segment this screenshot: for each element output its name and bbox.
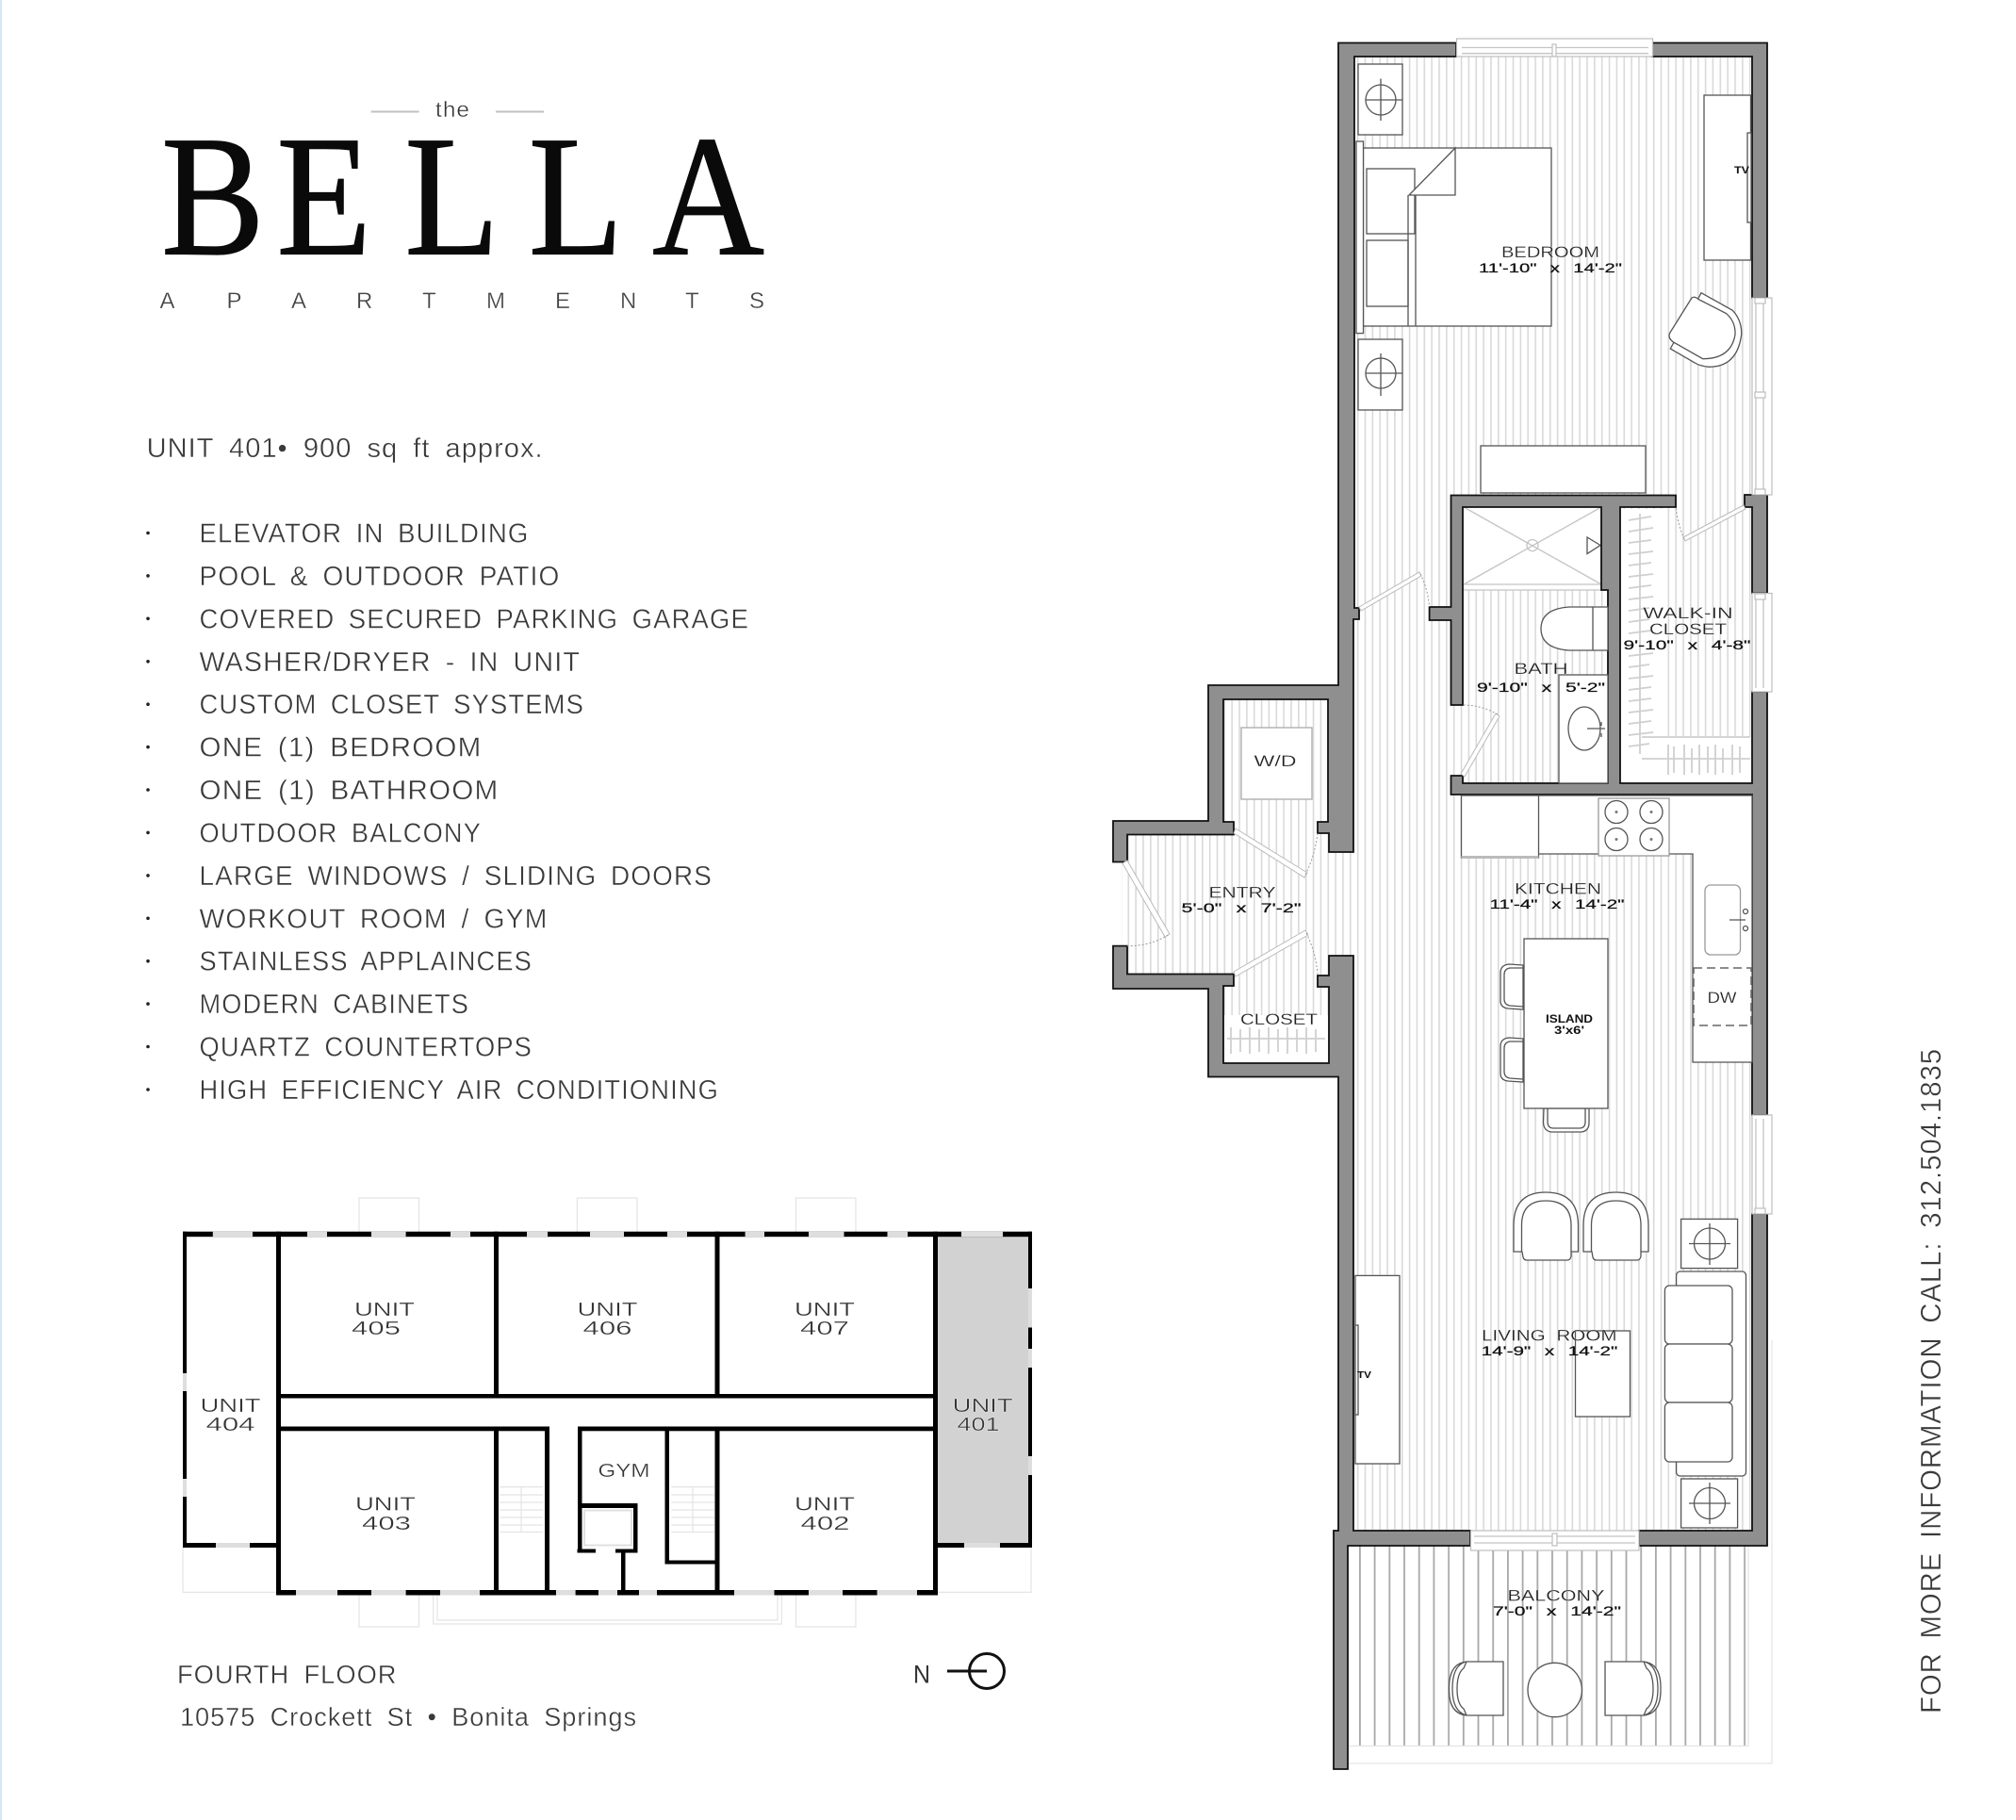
unit labels: 404: [205, 1415, 254, 1435]
unit labels: UNIT: [795, 1495, 855, 1516]
unit labels: 406: [582, 1319, 631, 1339]
logo subtitle: APARTMENTS: APARTMENTS: [160, 288, 764, 314]
wall: lower-left and balcony: [1113, 946, 1470, 1769]
fourth floor key plan: [183, 1198, 1032, 1627]
amenities list: ELEVATOR IN BUILDING: [200, 518, 530, 549]
kitchen sink: [1705, 885, 1747, 955]
TV console: [1355, 1275, 1400, 1464]
amenities list: QUARTZ COUNTERTOPS: [200, 1033, 533, 1063]
floor caption: FOURTH FLOOR: [177, 1660, 398, 1689]
dishwasher: DW: [1708, 989, 1736, 1007]
wall: bottom-right: [1639, 1214, 1767, 1546]
balconies outline: [183, 1198, 1031, 1627]
balcony chair right: [1605, 1662, 1661, 1715]
wall: top-left and laundry: [1113, 43, 1456, 861]
door: closet: [1234, 930, 1318, 976]
room label: walk-in closet: WALK-IN: [1643, 604, 1733, 622]
shower: [1464, 507, 1601, 590]
amenities list: [146, 518, 749, 1106]
elevator cab: [584, 1510, 631, 1546]
dishwasher: [1694, 968, 1751, 1025]
unit labels: UNIT: [200, 1396, 260, 1417]
room label: balcony: BALCONY: [1508, 1587, 1604, 1605]
room label: living room: LIVING ROOM: [1482, 1327, 1617, 1344]
building walls: [183, 1232, 1032, 1595]
room label: entry: [1182, 884, 1302, 915]
unit labels: 401: [958, 1415, 999, 1435]
refrigerator: [1461, 795, 1538, 859]
unit labels: 403: [362, 1514, 411, 1534]
room label: bedroom: 11'-10" x 14'-2": [1479, 260, 1622, 275]
door: apartment hall: [1359, 572, 1430, 611]
amenities list: COVERED SECURED PARKING GARAGE: [200, 604, 749, 634]
stools at island: [1500, 964, 1589, 1132]
logo rule right: [496, 111, 544, 113]
window openings: [183, 1232, 1032, 1595]
wall: bath and kitchen core: [1430, 496, 1767, 1115]
room label: kitchen: 11'-4" x 14'-2": [1489, 896, 1625, 911]
amenities list: ONE (1) BEDROOM: [200, 733, 483, 763]
room label: bath: BATH: [1514, 660, 1568, 678]
kitchen island: ISLAND: [1546, 1012, 1593, 1025]
washer dryer: W/D: [1254, 752, 1297, 770]
room label: entry: ENTRY: [1208, 884, 1276, 902]
bedroom armchair: [1669, 293, 1742, 367]
room label: walk-in closet: 9'-10" x 4'-8": [1623, 637, 1751, 652]
amenities list: HIGH EFFICIENCY AIR CONDITIONING: [200, 1075, 719, 1106]
TV console: TV: [1357, 1370, 1371, 1381]
amenities list: POOL & OUTDOOR PATIO: [200, 562, 560, 592]
side table: living top: [1681, 1219, 1738, 1269]
apartment floor plan: [1113, 39, 1772, 1769]
toilet: [1541, 607, 1608, 650]
wall: top-right: [1652, 43, 1767, 298]
living armchair left: [1514, 1192, 1578, 1260]
amenities list: LARGE WINDOWS / SLIDING DOORS: [200, 861, 713, 892]
unit labels: UNIT: [355, 1495, 416, 1516]
unit size heading: UNIT 401• 900 sq ft approx.: [147, 434, 544, 464]
unit labels: UNIT: [354, 1300, 415, 1320]
nightstand: bedroom bottom: [1358, 339, 1402, 410]
entry closet shelving: [1224, 1015, 1328, 1062]
sofa: [1664, 1271, 1746, 1476]
contact phone vertical text: FOR MORE INFORMATION CALL: 312.504.1835: [1914, 1048, 1947, 1713]
balcony decking: [1348, 1340, 1772, 1763]
door: laundry: [1234, 828, 1318, 877]
stairs: [500, 1487, 714, 1533]
room label: entry: 5'-0" x 7'-2": [1182, 900, 1302, 915]
kitchen counter: [1538, 795, 1752, 1062]
room label: walk-in closet: [1623, 604, 1751, 652]
bath vanity: [1559, 675, 1608, 783]
unit labels: 405: [352, 1319, 401, 1339]
unit labels: 407: [800, 1319, 849, 1339]
dresser with TV: [1704, 95, 1751, 260]
room label: balcony: 7'-0" x 14'-2": [1493, 1603, 1621, 1618]
window: living right: [1752, 1115, 1772, 1214]
room label: kitchen: KITCHEN: [1515, 880, 1601, 897]
unit labels: [200, 1300, 1013, 1534]
window: bedroom top: [1457, 39, 1653, 57]
coffee table: [1576, 1331, 1631, 1417]
room label: living room: [1482, 1327, 1617, 1358]
address: 10575 Crockett St • Bonita Springs: [180, 1702, 637, 1731]
sliding door: balcony: [1470, 1531, 1639, 1550]
unit labels: UNIT: [577, 1300, 637, 1320]
amenities list: OUTDOOR BALCONY: [200, 818, 482, 848]
logo: the Bella Apartments: [160, 97, 764, 314]
bench: [1481, 446, 1646, 493]
amenities list: MODERN CABINETS: [200, 990, 469, 1020]
amenities list: WORKOUT ROOM / GYM: [200, 904, 549, 934]
floor stripes: [1122, 57, 1752, 1532]
logo wordmark: BELLA: BELLA: [161, 101, 764, 291]
logo word: the: the: [435, 97, 470, 122]
north arrow: [913, 1653, 1005, 1689]
logo rule left: [371, 111, 419, 113]
room label: bath: 9'-10" x 5'-2": [1477, 680, 1605, 695]
room label: kitchen: [1489, 880, 1625, 911]
room label: closet: CLOSET: [1240, 1010, 1318, 1028]
walk-in closet shelving: [1621, 509, 1751, 782]
north arrow: N: [913, 1661, 930, 1689]
wall: right of bedroom door: [1745, 495, 1767, 594]
room label: balcony: [1493, 1587, 1621, 1618]
balcony table: [1528, 1663, 1582, 1717]
room label: living room: 14'-9" x 14'-2": [1482, 1343, 1617, 1358]
nightstand: bedroom top: [1358, 64, 1402, 135]
room label: bath: [1477, 660, 1605, 695]
amenities list: STAINLESS APPLAINCES: [200, 947, 533, 977]
room label: bedroom: BEDROOM: [1501, 243, 1599, 261]
amenities list: WASHER/DRYER - IN UNIT: [200, 648, 581, 678]
side table: living bottom: [1681, 1479, 1738, 1528]
unit labels: UNIT: [795, 1300, 855, 1320]
door: bath: [1461, 705, 1500, 777]
window: bedroom right: [1752, 298, 1772, 495]
unit labels: UNIT: [953, 1396, 1013, 1417]
unit labels: 402: [801, 1514, 850, 1534]
window: closet: [1752, 594, 1772, 692]
washer dryer: [1241, 728, 1312, 799]
balcony chair left: [1449, 1662, 1503, 1715]
room label: bedroom: [1479, 243, 1622, 275]
bed: [1356, 141, 1551, 334]
cooktop: [1598, 798, 1669, 856]
living armchair right: [1583, 1192, 1648, 1260]
room label: walk-in closet: CLOSET: [1649, 620, 1727, 638]
amenities list: CUSTOM CLOSET SYSTEMS: [200, 690, 584, 720]
door: entry: [1123, 861, 1170, 946]
unit labels: GYM: [598, 1461, 650, 1482]
door: walk-in closet: [1676, 505, 1746, 541]
highlighted unit 401: [935, 1237, 1029, 1543]
kitchen island: 3'x6': [1554, 1024, 1584, 1037]
dresser with TV: TV: [1734, 165, 1750, 176]
amenities list: ONE (1) BATHROOM: [200, 776, 500, 806]
kitchen island: [1524, 939, 1608, 1108]
